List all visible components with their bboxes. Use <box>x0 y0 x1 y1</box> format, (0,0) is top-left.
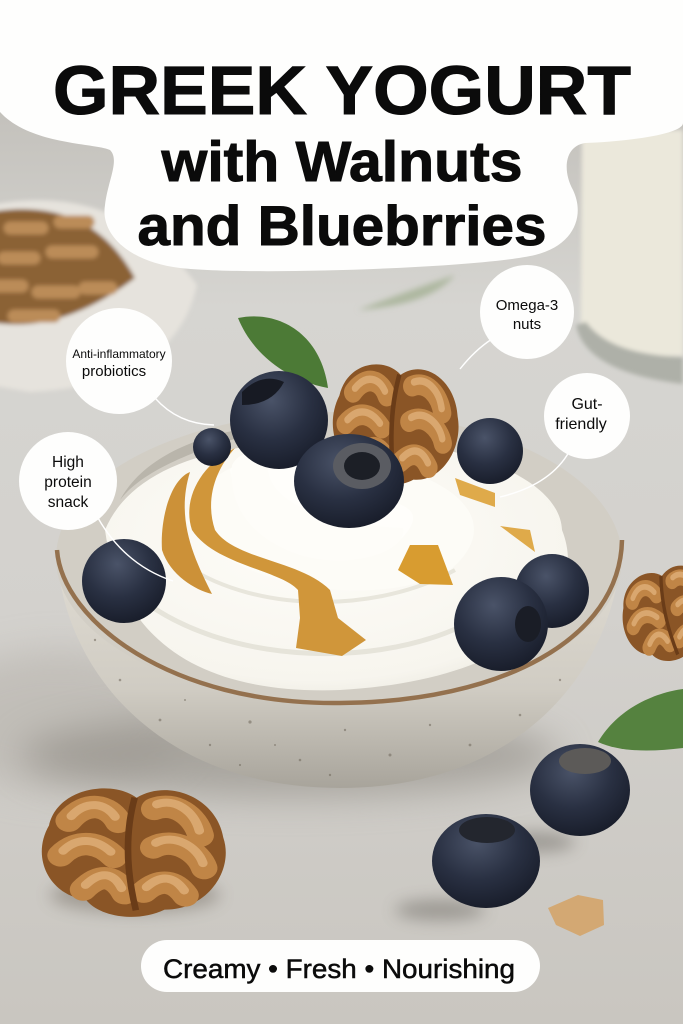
title: and Bluebrries <box>138 194 546 257</box>
title: GREEK YOGURT <box>53 52 631 129</box>
blueberries on bowl <box>82 371 589 671</box>
bowl rim <box>57 540 622 703</box>
callout: High protein snack: snack <box>48 494 88 511</box>
callout: Omega-3 nuts: Omega-3 <box>496 297 558 314</box>
yogurt <box>105 440 568 690</box>
callout: Gut-friendly <box>544 373 630 459</box>
yogurt peak <box>232 454 403 560</box>
callout: Anti-inflammatory probiotics <box>66 308 172 414</box>
callout: High protein snack: protein <box>44 474 92 491</box>
honey drizzle <box>162 448 535 656</box>
bowl speckles <box>94 639 561 776</box>
title: with Walnuts <box>160 130 522 194</box>
background bowl of walnuts <box>0 200 197 392</box>
loose blueberries <box>395 744 630 920</box>
callout lines <box>98 339 569 581</box>
tagline pill <box>141 940 540 992</box>
bowl body <box>57 540 622 788</box>
walnut topping <box>325 354 467 497</box>
walnut front left <box>34 780 233 925</box>
title <box>53 52 631 257</box>
blurred background leaf <box>358 275 455 310</box>
title banner <box>0 0 683 271</box>
callout: Omega-3 nuts: nuts <box>513 316 541 333</box>
table shadow under bowl <box>20 713 560 797</box>
callout: High protein snack: High <box>52 454 84 471</box>
callout: Anti-inflammatory probiotics: Anti-inflammatory <box>72 347 166 361</box>
yogurt bowl <box>56 412 622 788</box>
leaf garnish <box>238 316 328 388</box>
callout: Omega-3 nuts <box>480 265 574 359</box>
callout: Anti-inflammatory probiotics: probiotics <box>82 363 146 380</box>
tagline pill: Creamy • Fresh • Nourishing <box>163 954 515 984</box>
callout: Gut-friendly: friendly <box>555 416 607 433</box>
walnut front left shadow <box>50 877 220 913</box>
walnut right edge <box>617 561 683 668</box>
small walnut piece <box>548 895 604 936</box>
callout: Gut-friendly: Gut- <box>571 396 603 413</box>
callout: High protein snack <box>19 432 117 530</box>
bowl inner wall <box>56 412 622 704</box>
background glass of milk <box>576 130 683 384</box>
green leaf right <box>598 689 683 750</box>
